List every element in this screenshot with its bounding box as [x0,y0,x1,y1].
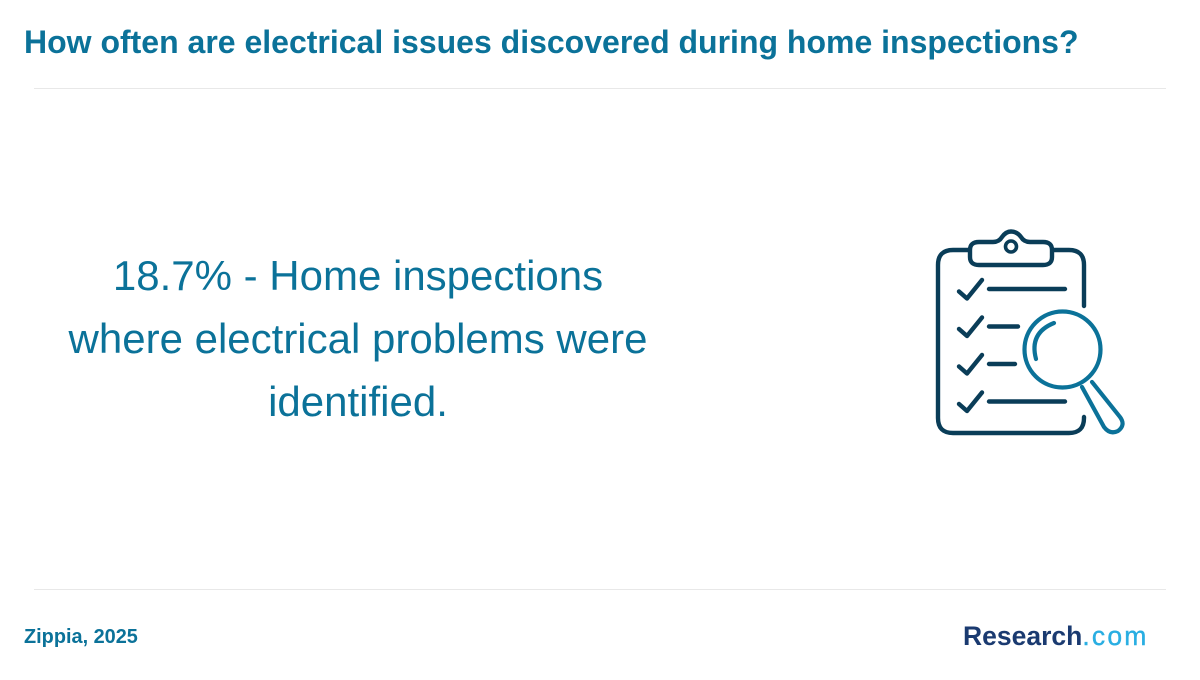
main statistic text [68,252,647,425]
clipboard [938,232,1084,433]
main statistic text: identified. [268,378,448,425]
title: How often are electrical issues discovered during home inspections? [24,24,1079,60]
logo: Research.com: Research.com [963,621,1149,651]
magnifying glass [1024,312,1123,432]
main statistic text: 18.7% - Home inspections [113,252,603,299]
icon: clipboard with magnifying glass [936,229,1125,436]
main statistic text: where electrical problems were [69,315,647,362]
source label: Zippia, 2025 [24,626,138,648]
